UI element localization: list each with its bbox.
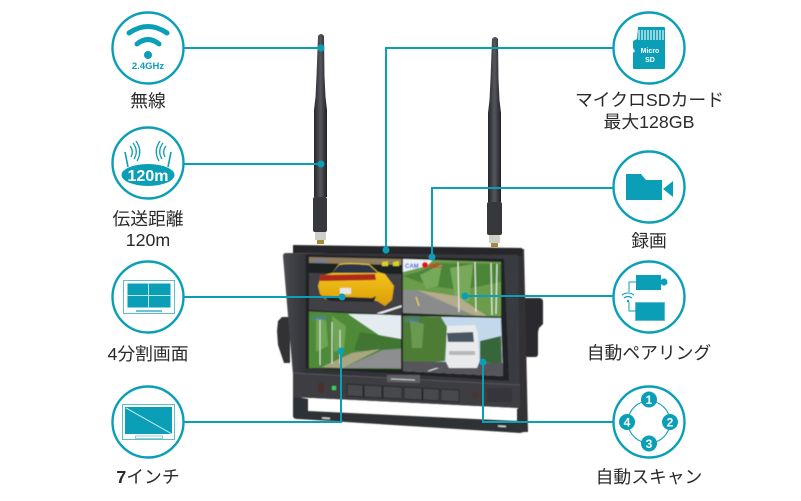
icon: wifi 2.4GHz: 2.4GHz [132, 61, 164, 72]
icon: auto scan: 2 [667, 416, 674, 430]
antenna: right [487, 37, 502, 247]
side arm [518, 249, 528, 432]
label: split screen: 4分割画面 [107, 344, 189, 364]
label: micro SD: マイクロSDカード [575, 90, 724, 110]
icon: 4 split screen [112, 262, 184, 332]
label: auto scan: 自動スキャン [596, 467, 702, 487]
connector: auto pairing [462, 292, 613, 300]
screen: top right camera view [403, 259, 501, 317]
icon: micro SD card [614, 12, 684, 84]
screen: top right camera view: CAM [405, 264, 419, 270]
screen: bottom right camera view: CAM3 [405, 318, 419, 324]
speaker grille [487, 388, 512, 402]
screen: bottom right camera view [403, 316, 503, 376]
screen: top left camera view: CAM1 [313, 259, 327, 265]
icon: wifi 2.4GHz [112, 12, 184, 84]
bezel [283, 253, 520, 408]
label: 7 inch: 7インチ [116, 467, 180, 487]
icon: auto scan: 1 [646, 393, 653, 407]
mount bracket: right [523, 298, 543, 357]
mount knob: left [277, 317, 290, 363]
screen frame [306, 255, 509, 381]
label: record: 録画 [631, 231, 667, 251]
connector: 7 inch [184, 348, 344, 422]
bezel top strip [293, 245, 522, 256]
icon: auto scan: 3 [646, 437, 653, 451]
screen: bottom left camera view [309, 311, 401, 369]
stand [293, 396, 528, 433]
label: wireless: 無線 [130, 91, 166, 111]
connector: record [428, 188, 613, 260]
label: micro SD: 最大128GB [604, 112, 694, 132]
label: range: 伝送距離 [112, 209, 184, 229]
connector: wireless [184, 44, 324, 52]
connector: range [184, 160, 324, 168]
card slot [387, 375, 420, 383]
connector: auto scan [480, 358, 613, 422]
icon: auto scan: 4 [624, 416, 631, 430]
control buttons [347, 384, 459, 402]
icon: 7 inch screen [112, 386, 184, 458]
ir sensor [472, 392, 478, 398]
screen: top left camera view [309, 257, 402, 315]
screen: bottom left camera view: CAM2 [312, 316, 326, 322]
connector: micro SD [382, 48, 613, 254]
status led [332, 386, 336, 390]
antenna: left [313, 34, 327, 244]
screen dividers [309, 259, 501, 371]
label: micro SD [575, 90, 724, 132]
icon: micro SD card: SD [645, 57, 655, 64]
icon: video folder [614, 152, 684, 222]
icon: micro SD card: Micro [641, 48, 659, 55]
label: range: 120m [126, 230, 170, 250]
lower control panel [293, 373, 520, 408]
connector: split screen [184, 294, 346, 300]
label: auto pairing: 自動ペアリング [587, 343, 711, 363]
icon: auto scan [614, 386, 684, 458]
power button [318, 383, 324, 392]
monitor [277, 245, 543, 433]
icon: 120m range [112, 128, 184, 198]
screen: top right camera view: REC [429, 264, 442, 270]
icon: 120m range: 120m [128, 168, 168, 185]
icon: auto pairing [614, 262, 684, 332]
label: range [112, 209, 184, 250]
